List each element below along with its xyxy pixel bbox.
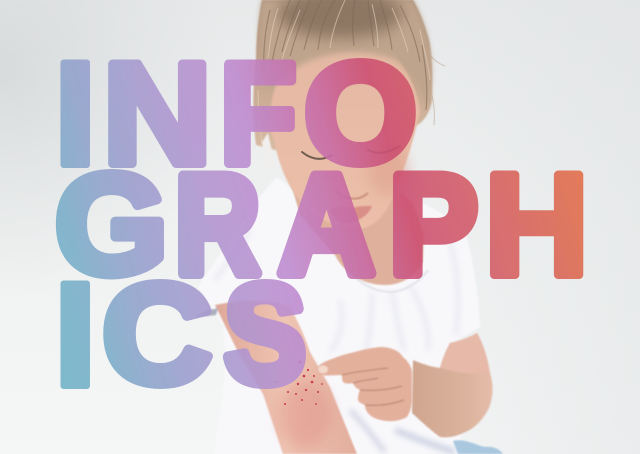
sleeve shadow xyxy=(195,308,218,316)
line 2: GRAPH: G xyxy=(55,146,168,304)
line 2: GRAPH xyxy=(55,143,589,306)
hair back xyxy=(253,0,432,150)
blue clothing corner xyxy=(453,440,503,454)
fingernail xyxy=(318,366,328,374)
line 2: GRAPH: H xyxy=(485,143,589,306)
line 1: INFO: I xyxy=(53,30,98,197)
line 2: GRAPH: R xyxy=(175,145,260,304)
pointing hand xyxy=(317,347,412,421)
line 3: ICS: S xyxy=(224,255,306,412)
neck xyxy=(290,180,424,285)
shirt shading xyxy=(215,230,458,452)
hair front xyxy=(260,0,431,112)
finger creases xyxy=(342,368,404,405)
line 1: INFO: O xyxy=(304,34,417,192)
eyelashes xyxy=(302,146,400,159)
photo: child with rash on arm xyxy=(195,0,503,454)
dark hair crown xyxy=(278,0,402,38)
shirt xyxy=(198,177,480,454)
line 1: INFO: N xyxy=(103,34,212,195)
white gap by hair strand xyxy=(262,133,276,170)
cheek tint xyxy=(368,144,408,196)
line 3: ICS xyxy=(53,251,306,418)
face xyxy=(270,42,420,229)
left arm with rash xyxy=(215,301,357,454)
line 2: GRAPH: A xyxy=(278,147,375,304)
rash redness xyxy=(279,381,331,449)
mouth xyxy=(330,206,372,223)
line 3: ICS: C xyxy=(102,255,212,414)
collar xyxy=(345,262,428,292)
rash spots xyxy=(275,360,323,405)
line 3: ICS: I xyxy=(53,251,98,418)
line 1: INFO: F xyxy=(220,34,296,194)
nose shadow xyxy=(335,190,368,199)
title lettering: INFOGRAPHICS xyxy=(53,30,589,418)
line 1: INFO xyxy=(53,30,417,197)
line 2: GRAPH: P xyxy=(389,146,478,304)
hair strands xyxy=(264,0,427,110)
right arm xyxy=(412,333,493,437)
